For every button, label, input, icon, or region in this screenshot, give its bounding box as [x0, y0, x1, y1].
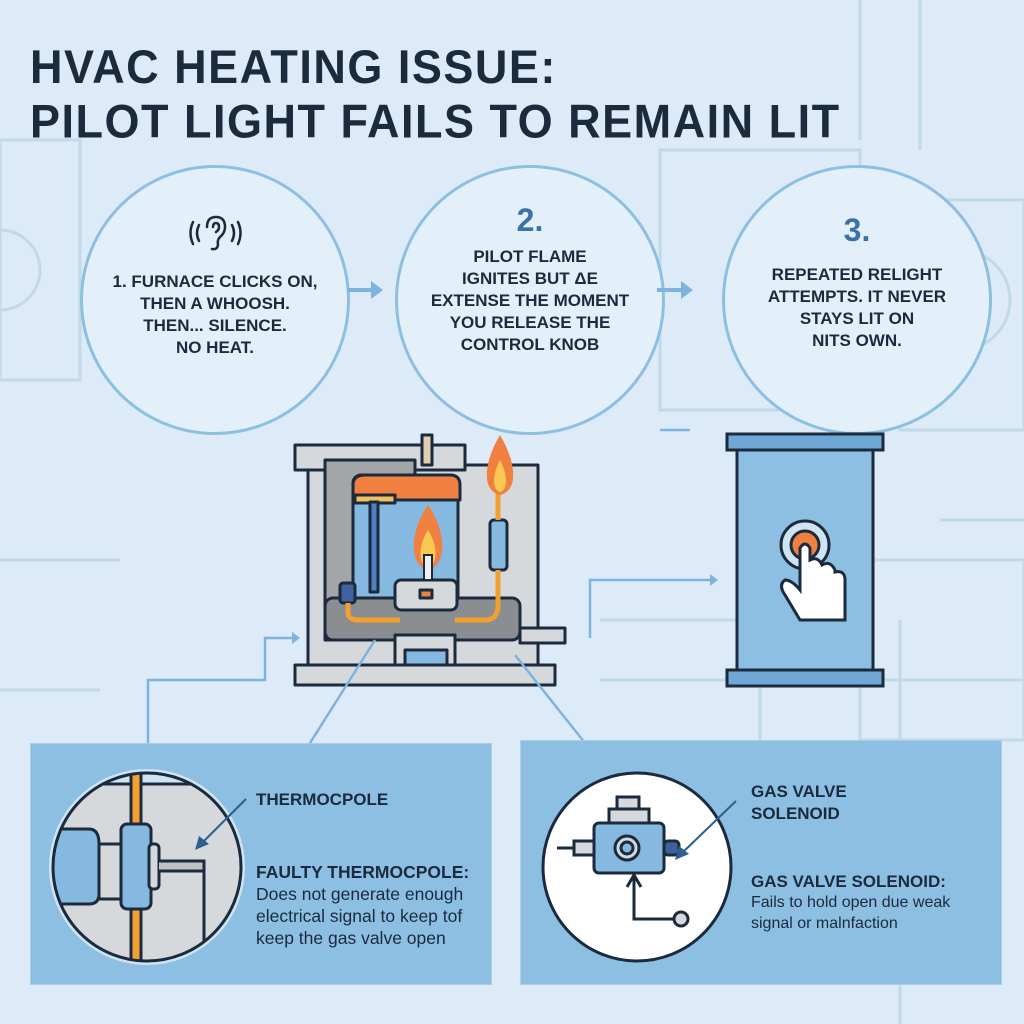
step 3 circle [722, 165, 992, 435]
description: Fails to hold open due weak [751, 894, 950, 911]
description [256, 862, 469, 948]
label [751, 782, 847, 823]
icon: gas valve closeup [542, 772, 732, 962]
step 2 circle [395, 165, 665, 435]
label: GAS VALVE [751, 782, 847, 801]
step 1 circle: NO HEAT. [176, 338, 254, 357]
step 3 circle: 3. [844, 212, 870, 248]
arrow [675, 800, 737, 860]
step 2 circle: IGNITES BUT ΔE [462, 269, 598, 288]
icon: ear [189, 216, 242, 250]
control panel with push button [726, 432, 884, 688]
title: PILOT LIGHT FAILS TO REMAIN LIT [30, 95, 841, 148]
step 3 circle: ATTEMPTS. IT NEVER [768, 287, 946, 306]
step 2 circle: YOU RELEASE THE [450, 313, 610, 332]
label: THERMOCPOLE [256, 790, 388, 809]
description: signal or malnfaction [751, 915, 898, 932]
description: keep the gas valve open [256, 928, 446, 948]
panel: thermocouple [30, 743, 492, 985]
step 1 circle: 1. FURNACE CLICKS ON, [113, 272, 317, 291]
step 1 circle: THEN A WHOOSH. [140, 294, 290, 313]
description [751, 872, 950, 932]
description: electrical signal to keep tof [256, 906, 462, 926]
step 3 circle: REPEATED RELIGHT [772, 265, 942, 284]
panel: gas valve [520, 740, 1002, 985]
step 2 circle: 2. [517, 202, 543, 238]
step 3 circle: NITS OWN. [812, 331, 902, 350]
step 2 circle: EXTENSE THE MOMENT [431, 291, 629, 310]
step 2 circle: CONTROL KNOB [461, 335, 599, 354]
title: HVAC HEATING ISSUE: [30, 40, 557, 94]
furnace illustration [294, 434, 566, 686]
title [30, 40, 841, 148]
description: Does not generate enough [256, 884, 463, 904]
step 1 circle [80, 165, 350, 435]
step 3 circle: STAYS LIT ON [800, 309, 914, 328]
label: SOLENOID [751, 804, 840, 823]
arrow [195, 798, 247, 850]
icon: thermocouple closeup [49, 769, 245, 965]
description: FAULTY THERMOCPOLE: [256, 862, 469, 882]
arrow 2 [657, 281, 693, 299]
description: GAS VALVE SOLENOID: [751, 872, 946, 891]
arrow 1 [347, 281, 383, 299]
step 2 circle: PILOT FLAME [473, 247, 587, 266]
step 1 circle: THEN... SILENCE. [143, 316, 287, 335]
